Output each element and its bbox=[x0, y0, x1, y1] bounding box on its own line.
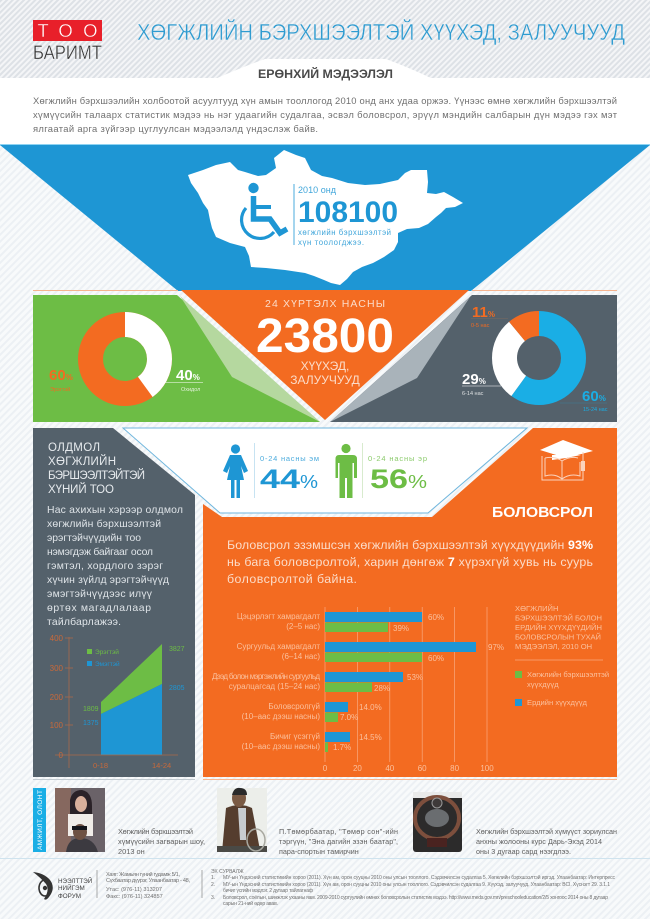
headline number: хүн тоологджээ. bbox=[298, 238, 364, 247]
stat: women 44%: % bbox=[300, 472, 318, 492]
caption: fashion show: Хөгжлийн бэрхшээлтэй bbox=[118, 827, 193, 836]
chart legend: Эрэгтэй bbox=[95, 648, 119, 656]
text block: эмэгтэйчүүдээс илүү bbox=[47, 589, 153, 600]
bar chart: 60 bbox=[418, 764, 427, 773]
logo: Open Society Forum bbox=[33, 872, 93, 900]
bar chart: (10–аас дээш насны) bbox=[242, 742, 320, 751]
logo: Too Barimt: БАРИМТ bbox=[33, 43, 102, 64]
heading bbox=[48, 442, 145, 496]
logo: Too Barimt: ТОО bbox=[38, 20, 98, 41]
area chart: 1809 bbox=[83, 706, 99, 713]
label: 29%: 6-14 нас bbox=[462, 391, 484, 397]
stat: women 44% bbox=[260, 454, 319, 494]
logo: Too Barimt bbox=[33, 20, 102, 64]
heading: БЭРШЭЭЛТЭЙТЭЙ bbox=[48, 469, 145, 482]
area chart bbox=[50, 634, 185, 770]
panel: central orange triangle: 23800 bbox=[256, 310, 394, 363]
logo: Open Society Forum: НИЙГЭМ bbox=[58, 883, 85, 892]
text block: хөгжлийн бэрхшээлтэй bbox=[47, 518, 161, 530]
sources: Боловсрол, соёлын, шинжлэх ухааны яам. 2009-2010 сургуулийн өмнөх боловсролын статистик мэдээ. http://www.meds.gov.mn/preschooleducation/2/5 хонгоос 2014 оны 8 дугаар bbox=[223, 894, 608, 901]
bar chart: 40 bbox=[385, 764, 395, 773]
headline number: хөгжлийн бэрхшээлтэй bbox=[298, 228, 391, 237]
text block: хүчин зүйлд эрэгтэйчүүд bbox=[47, 575, 169, 586]
label: 29% bbox=[462, 371, 501, 397]
sources: 3. bbox=[211, 895, 215, 901]
logo: Open Society Forum: НЭЭЛТТЭЙ bbox=[58, 876, 93, 885]
bar chart: 97% bbox=[488, 643, 504, 652]
bar chart: 14.0% bbox=[359, 703, 382, 712]
panel: central orange triangle: ЗАЛУУЧУУД bbox=[290, 373, 360, 387]
photo: steering wheel bbox=[413, 792, 462, 852]
panel: sex donut (green) bbox=[33, 295, 320, 422]
chart legend: БОЛОВСРОЛЫН ТУХАЙ bbox=[515, 632, 601, 642]
contact details: Хаяг: Жамьян гүний гудамж 5/1, bbox=[106, 871, 180, 878]
bar chart: (10–аас дээш насны) bbox=[242, 712, 320, 721]
chart legend: Хөгжлийн бэрхшээлтэй bbox=[527, 670, 609, 679]
stat: men 56%: 0-24 насны эр bbox=[368, 454, 427, 463]
bar chart: 20 bbox=[353, 764, 362, 773]
caption: driving course: оны 3 дугаар сард нээгдлээ. bbox=[476, 847, 571, 856]
text block bbox=[227, 538, 593, 586]
contact details bbox=[106, 871, 190, 900]
bar chart: 7.0% bbox=[340, 713, 358, 722]
chart legend: ЕРДИЙН ХҮҮХДҮҮДИЙН bbox=[515, 623, 602, 632]
contact details: Утас: (976-11) 313207 bbox=[106, 887, 162, 893]
chart legend: МЭДЭЭЛЭЛ, 2010 ОН bbox=[515, 642, 592, 651]
label: 60%: Эрэгтэй bbox=[50, 386, 70, 393]
donut chart bbox=[90, 324, 160, 394]
bar chart: Цэцэрлэгт хамрагдалт bbox=[237, 612, 320, 621]
intro text: ялгаатай арга зүйгээр цуглуулсан мэдээлэлд үндэслэж байв. bbox=[33, 123, 318, 134]
label: 40%: 40% bbox=[176, 367, 200, 384]
sources: ЭХ СУРВАЛЖ bbox=[211, 869, 244, 875]
bar chart: 28% bbox=[374, 684, 390, 693]
chart legend: Ердийн хүүхдүүд bbox=[527, 698, 588, 707]
area chart: 400 bbox=[50, 634, 64, 643]
bar chart: 39% bbox=[393, 624, 409, 633]
text block: Нас ахихын хэрээр олдмол bbox=[47, 505, 183, 516]
bar chart: Дээд болон мэргэжлийн сургуульд bbox=[212, 672, 320, 681]
area chart: 0 bbox=[59, 751, 64, 760]
map of Mongolia with headline figure bbox=[188, 150, 463, 285]
bar chart: (6–14 нас) bbox=[282, 652, 320, 661]
stat: women 44%: 0-24 насны эм bbox=[260, 454, 319, 463]
headline number bbox=[298, 185, 398, 247]
label: 11%: 0-5 нас bbox=[471, 323, 490, 329]
panel: central orange triangle: ХҮҮХЭД, bbox=[301, 359, 349, 373]
text block: нэмэгдэж байгааг осол bbox=[47, 546, 153, 558]
panel: congenital disability bbox=[33, 428, 195, 777]
headline number: 2010 онд bbox=[298, 185, 337, 195]
text block: боловсролтой байна. bbox=[227, 572, 357, 586]
bar chart: (2–5 нас) bbox=[286, 622, 320, 631]
caption: athlete: пара-спортын тамирчин bbox=[279, 847, 359, 856]
bar chart: 14.5% bbox=[359, 733, 382, 742]
caption: driving course: анхны жолооны курс Дарь-Эхэд 2014 bbox=[476, 837, 602, 846]
label: 60%: 60% bbox=[49, 367, 73, 384]
bar chart: 60% bbox=[428, 654, 444, 663]
bar chart: 80 bbox=[450, 764, 460, 773]
bar chart: Бичиг үсэггүй bbox=[270, 732, 320, 741]
bar chart: Боловсролгүй bbox=[268, 702, 320, 711]
heading: ОЛДМОЛ bbox=[48, 442, 100, 454]
intro text: Хөгжлийн бэрхшээлийн холбоотой асуултууд хүн амын тооллогод 2010 онд анх удаа оржээ. Үүнээс өмнө хөгжлийн бэрхшээлтэй bbox=[33, 95, 617, 106]
intro text bbox=[33, 95, 618, 134]
label: 60%: 15-24 нас bbox=[583, 407, 608, 413]
text block: эрэгтэйчүүдийн тоо bbox=[47, 533, 141, 544]
panel: age donut (grey) bbox=[330, 295, 617, 422]
text block: нь бага боловсролтой, харин дөнгөж 7 хүрэхгүй хувь нь суурь bbox=[227, 555, 593, 569]
caption: driving course bbox=[476, 827, 617, 856]
label: 60%: 60% bbox=[582, 388, 606, 405]
label: 11%: 11% bbox=[472, 304, 495, 321]
logo: Open Society Forum: ФОРУМ bbox=[58, 893, 81, 900]
text block: тайлбарлажээ. bbox=[47, 616, 121, 628]
caption: athlete: П.Төмөрбаатар, "Төмөр сон"-ийн bbox=[279, 827, 398, 836]
heading: БОЛОВСРОЛ bbox=[492, 505, 593, 521]
chart legend: БЭРХШЭЭЛТЭЙ БОЛОН bbox=[515, 614, 602, 622]
contact details: Сүхбаатар дүүрэг, Улаанбаатар - 48, bbox=[106, 878, 190, 884]
caption: fashion show: хүмүүсийн загварын шоу, bbox=[118, 837, 205, 846]
panel: central orange triangle: 24 ХҮРТЭЛХ НАСНЫ bbox=[265, 298, 385, 310]
section heading: ЕРӨНХИЙ МЭДЭЭЛЭЛ bbox=[258, 68, 393, 81]
blue triangle panel bbox=[0, 144, 650, 291]
area chart: 0-18 bbox=[93, 761, 108, 770]
bar chart: 0 bbox=[323, 764, 328, 773]
bar chart: суралцагсад (15–24 нас) bbox=[229, 682, 320, 691]
sources: 2. bbox=[211, 882, 215, 888]
label: 40% bbox=[165, 367, 203, 393]
text block: Боловсрол эзэмшсэн хөгжлийн бэрхшээлтэй хүүхдүүдийн 93% bbox=[227, 538, 593, 552]
chart legend bbox=[515, 604, 609, 707]
chart legend: Эмэгтэй bbox=[95, 660, 120, 668]
stat: women 44%: 44 bbox=[260, 464, 300, 494]
panel: central orange triangle bbox=[181, 290, 469, 420]
area chart: 200 bbox=[50, 693, 64, 702]
text block: гэмтэл, хордлого зэрэг bbox=[47, 561, 163, 572]
icon: woman bbox=[223, 444, 248, 498]
chart legend: хүүхдүүд bbox=[527, 680, 559, 689]
header band bbox=[0, 0, 650, 145]
stat: men 56%: % bbox=[408, 472, 427, 492]
bar chart: 100 bbox=[480, 764, 494, 773]
icon: graduation cap and book bbox=[540, 440, 593, 480]
contact details: Факс: (976-11) 324857 bbox=[106, 894, 163, 900]
label: 40%: Охидол bbox=[181, 387, 200, 393]
text block bbox=[47, 505, 183, 628]
bar chart bbox=[212, 607, 504, 773]
intro text: хүмүүсийн талаарх статистик мэдээ нь нэг удаагийн судалгаа, эсвэл боловсрол, эрүүл мэндийн салбарын дүн мэдээ гэх мэт bbox=[33, 109, 618, 120]
sources: сарын 21-ний өдөр авав. bbox=[223, 900, 278, 907]
label: 60% bbox=[49, 367, 73, 393]
icon: man bbox=[336, 444, 357, 498]
chart legend bbox=[87, 648, 120, 668]
caption: athlete: тэргүүн, "Эна дагийн эзэн баатар", bbox=[279, 837, 398, 846]
stat: men 56%: 56 bbox=[370, 464, 408, 494]
bar chart: 60% bbox=[428, 613, 444, 622]
stat: men 56% bbox=[368, 454, 427, 494]
side tab: achievements bbox=[33, 788, 46, 852]
area chart: 100 bbox=[50, 721, 64, 730]
icon: wheelchair bbox=[242, 183, 287, 238]
sources: 1. bbox=[211, 875, 215, 881]
bar chart: 1.7% bbox=[333, 743, 351, 752]
area chart: 2805 bbox=[169, 685, 185, 692]
photo: fashion show bbox=[55, 788, 105, 852]
panel: gender ribbon bbox=[123, 428, 527, 513]
headline number: 108100 bbox=[298, 196, 398, 229]
area chart: 300 bbox=[50, 664, 64, 673]
photo: athlete bbox=[217, 788, 267, 852]
donut chart bbox=[504, 324, 574, 392]
text block: өртөх магадлалаар bbox=[47, 603, 151, 614]
area chart: 3827 bbox=[169, 646, 185, 653]
panel: education (orange) bbox=[203, 428, 617, 777]
sources bbox=[211, 869, 616, 907]
caption: athlete bbox=[279, 827, 398, 856]
area chart: 14-24 bbox=[152, 761, 171, 770]
label: 11% bbox=[471, 304, 508, 329]
sources: МУ-ын Үндэсний статистикийн хороо (2011). Хүн ам, орон сууцны 2010 оны улсын тооллого. Сэдэвчилсэн судалгаа 9. Хүүхэд, залуучууд. Улаанбаатар: BCI. Хүснэгт 29. 3.1.1 bbox=[223, 881, 610, 888]
heading: ХӨГЖЛИЙН bbox=[48, 455, 116, 468]
chart legend: ХӨГЖЛИЙН bbox=[515, 604, 558, 613]
map shape bbox=[188, 150, 463, 285]
label: 60% bbox=[560, 388, 608, 413]
bar chart: 53% bbox=[407, 673, 423, 682]
side tab: achievements: АМЖИЛТ, ОЛОНТ bbox=[37, 790, 44, 850]
bar chart: Сургуульд хамрагдалт bbox=[237, 642, 320, 651]
heading: ХҮНИЙ ТОО bbox=[48, 483, 114, 496]
label: 29%: 29% bbox=[462, 371, 486, 388]
caption: fashion show: 2013 он bbox=[118, 847, 145, 856]
caption: driving course: Хөгжлийн бэрхшээлтэй хүмүүст зориулсан bbox=[476, 827, 617, 836]
sources: МУ-ын Үндэсний статистикийн хороо (2011). Хүн ам, орон сууцны 2010 оны улсын тооллого. Сэдэвчилсэн судалгаа 5. Хөгжлийн бэрхшээлтэй иргэд. Улаанбаатар: Интерпресс bbox=[223, 874, 616, 881]
sources: бичиг үсгийн мэдлэг. 2 дугаар тайлагнаф bbox=[223, 887, 313, 894]
caption: fashion show bbox=[118, 827, 205, 856]
area chart: 1375 bbox=[83, 720, 99, 727]
